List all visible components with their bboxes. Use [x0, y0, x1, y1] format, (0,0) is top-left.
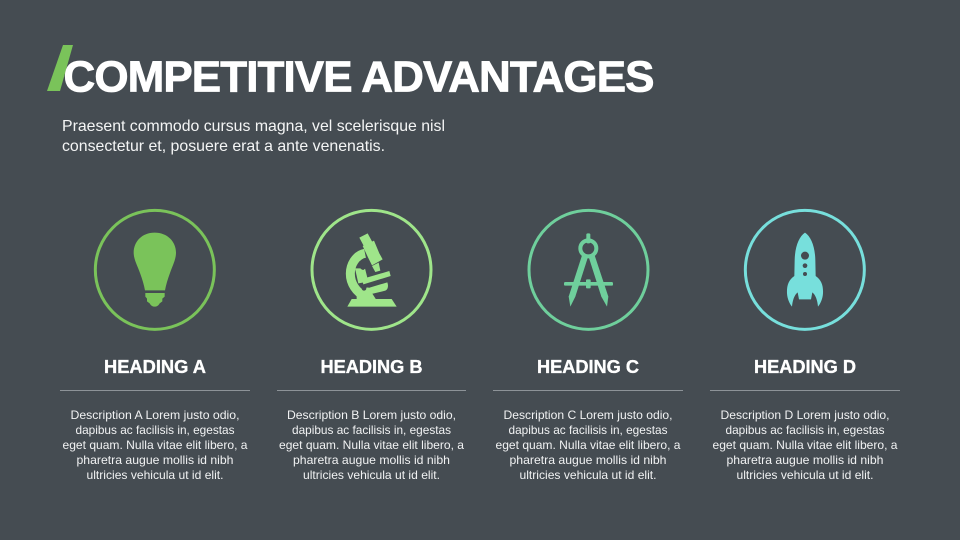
icon: microscope in circle: [312, 210, 431, 329]
panel: heading B column: [277, 210, 466, 482]
description: eget quam. Nulla vitae elit libero, a: [62, 438, 248, 452]
description: eget quam. Nulla vitae elit libero, a: [712, 438, 898, 452]
description: ultricies vehicula ut id elit.: [736, 468, 874, 482]
description: pharetra augue mollis id nibh: [293, 453, 450, 467]
subtitle: Praesent commodo cursus magna, vel scelerisque nisl: [62, 118, 445, 135]
description: [279, 408, 464, 482]
description: pharetra augue mollis id nibh: [510, 453, 666, 467]
heading: HEADING C: [537, 357, 639, 377]
title: COMPETITIVE ADVANTAGES: [64, 52, 654, 102]
description: ultricies vehicula ut id elit.: [520, 468, 656, 482]
heading: HEADING B: [320, 357, 422, 377]
icon: title slash accent: [47, 45, 73, 91]
description: dapibus ac facilisis in, egestas: [508, 423, 668, 437]
heading: HEADING A: [104, 357, 206, 377]
subtitle: [62, 118, 445, 155]
icon: rocket in circle: [745, 210, 864, 329]
description: pharetra augue mollis id nibh: [726, 453, 884, 467]
icon: light bulb in circle: [95, 210, 214, 329]
panel: heading C column: [493, 210, 683, 482]
description: eget quam. Nulla vitae elit libero, a: [496, 438, 681, 452]
description: [496, 408, 681, 482]
description: Description A Lorem justo odio,: [70, 408, 240, 422]
description: pharetra augue mollis id nibh: [76, 453, 234, 467]
subtitle: consectetur et, posuere erat a ante venenatis.: [62, 138, 385, 155]
panel: heading A column: [60, 210, 250, 482]
description: [712, 408, 898, 482]
description: Description B Lorem justo odio,: [287, 408, 456, 422]
icon: drawing compass in circle: [529, 210, 648, 329]
description: eget quam. Nulla vitae elit libero, a: [279, 438, 464, 452]
heading: HEADING D: [754, 357, 856, 377]
description: dapibus ac facilisis in, egestas: [292, 423, 451, 437]
description: dapibus ac facilisis in, egestas: [76, 423, 234, 437]
panel: heading D column: [710, 210, 900, 482]
description: Description D Lorem justo odio,: [720, 408, 890, 422]
description: ultricies vehicula ut id elit.: [86, 468, 224, 482]
description: [62, 408, 248, 482]
description: Description C Lorem justo odio,: [504, 408, 672, 422]
description: ultricies vehicula ut id elit.: [303, 468, 440, 482]
description: dapibus ac facilisis in, egestas: [726, 423, 884, 437]
